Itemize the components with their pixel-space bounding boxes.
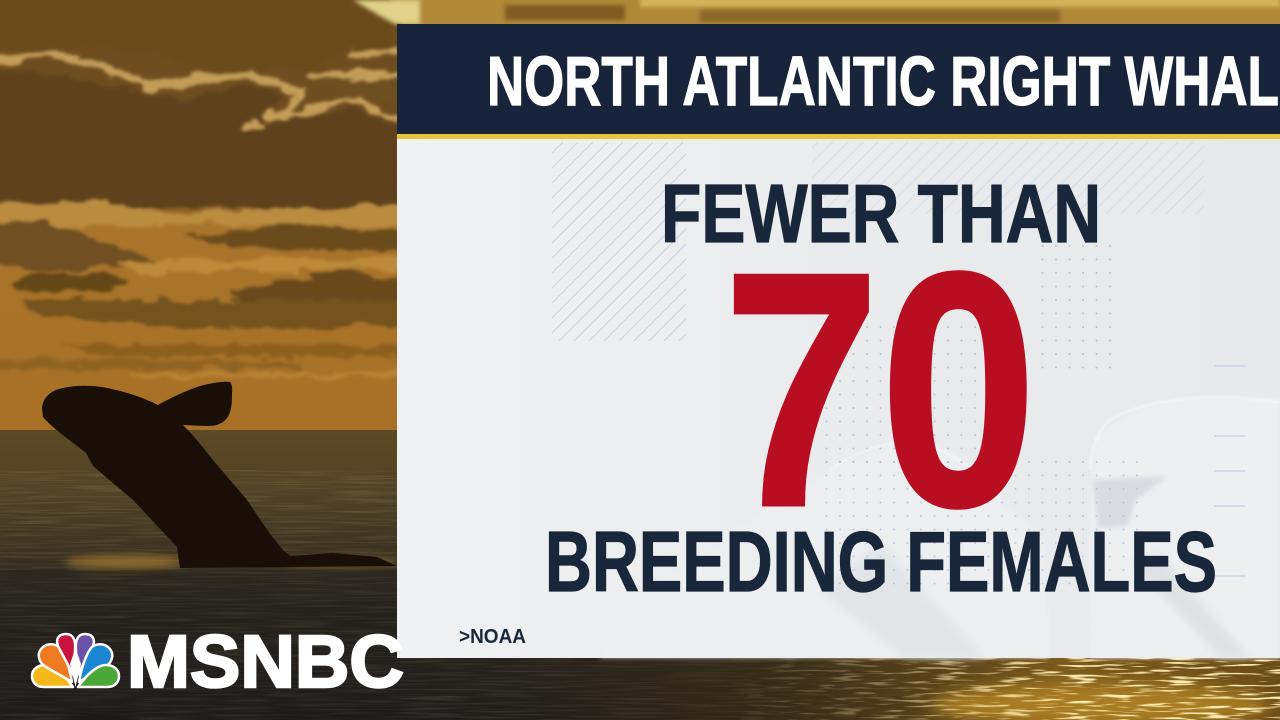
header bar <box>397 24 1280 134</box>
source label: >NOAA <box>459 626 526 648</box>
photo: sunset sky <box>0 0 1280 436</box>
photo: sea <box>0 430 1280 720</box>
bright cloud edges <box>0 50 400 125</box>
peacock icon <box>32 634 119 687</box>
bright sky corner <box>353 0 420 24</box>
msnbc wordmark: MSNBC <box>127 620 404 703</box>
dot patterns <box>818 245 1140 590</box>
big number 70: 70 <box>723 203 1037 576</box>
lower sky bands <box>0 200 400 378</box>
whale silhouette <box>42 382 397 568</box>
gold rule <box>397 134 1280 139</box>
panel body <box>397 139 1280 658</box>
msnbc logo <box>32 620 404 703</box>
decorative whale tail shapes <box>600 397 1280 658</box>
sun glint on water <box>596 658 1280 720</box>
top bright sky strip <box>380 0 1280 24</box>
dark upper clouds <box>0 0 400 208</box>
tick lines <box>1214 366 1245 576</box>
info panel <box>397 24 1280 658</box>
hatch patterns <box>552 142 1204 341</box>
text: fewer than: FEWER THAN <box>661 167 1101 260</box>
